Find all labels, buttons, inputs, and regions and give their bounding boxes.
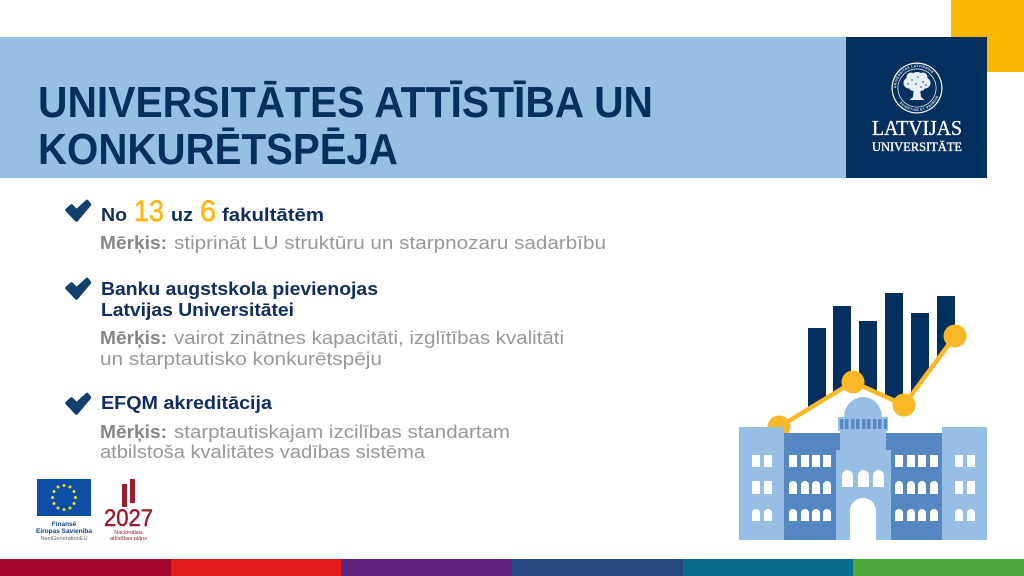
title: UNIVERSITĀTES ATTĪSTĪBA UN [38, 78, 653, 127]
logo wordmark: LATVIJAS [872, 116, 962, 140]
goal text: Mērķis: [100, 421, 167, 442]
goal text: Mērķis: [100, 327, 167, 348]
logo wordmark [872, 116, 962, 154]
heading: merger [101, 278, 378, 320]
logo: Latvijas Universitāte [846, 37, 987, 178]
item 2: Banku augstskola [67, 278, 564, 369]
heading: merger: Latvijas Universitātei [101, 299, 294, 320]
icon: university seal with oak tree: UNIVERSITAS LATVIENSIS [894, 64, 934, 88]
EU caption [36, 521, 92, 542]
logo wordmark: UNIVERSITĀTE [872, 139, 962, 154]
heading: from 13 to 6 faculties: uz [171, 204, 193, 225]
heading: merger: Banku augstskola pievienojas [101, 278, 378, 299]
EU caption: Eiropas Savienība [36, 528, 92, 535]
2027 wordmark: 2027 [104, 505, 153, 532]
yellow corner block [951, 0, 1024, 72]
EU caption: Finansē [52, 521, 77, 528]
heading: from 13 to 6 faculties: No [101, 204, 127, 225]
goal text: atbilstoša kvalitātes vadības sistēma [100, 441, 426, 462]
goal text [100, 421, 510, 462]
goal text [100, 327, 564, 369]
item 1: faculties [67, 195, 606, 253]
goal text: starptautiskajam izcilības standartam [174, 421, 510, 442]
icon: university seal with oak tree: SCIENTIAE ET PATRIAE [900, 96, 938, 111]
title [38, 78, 653, 174]
goal text: stiprināt LU struktūru un starpnozaru sadarbību [174, 232, 606, 253]
EU flag [37, 479, 91, 516]
university building [739, 397, 987, 540]
icon: check mark [67, 280, 90, 298]
item 3: EFQM [67, 392, 510, 462]
logo: National Development Plan 2027 [104, 479, 153, 542]
plan caption [110, 530, 147, 542]
heading: from 13 to 6 faculties [101, 195, 324, 228]
heading: EFQM accreditation: EFQM akreditācija [101, 392, 273, 413]
heading: from 13 to 6 faculties: fakultātēm [222, 204, 324, 225]
bottom colour stripe [0, 559, 1024, 576]
windows [752, 455, 975, 540]
goal text: un starptautisko konkurētspēju [100, 348, 382, 369]
line chart [768, 324, 966, 438]
icon: check mark [67, 394, 90, 413]
illustration: growth chart and university building [739, 293, 1000, 540]
logo: EU funding [36, 479, 92, 542]
goal text: Mērķis: [100, 232, 167, 253]
plan caption: attīstības plāns [110, 536, 147, 542]
bar chart [808, 293, 955, 418]
heading: from 13 to 6 faculties: 13 [134, 195, 164, 228]
heading: from 13 to 6 faculties: 6 [200, 195, 216, 228]
icon: check mark [67, 202, 90, 220]
header panel [0, 37, 846, 178]
plan caption: Nacionālais [114, 530, 143, 536]
title: KONKURĒTSPĒJA [38, 125, 398, 174]
EU caption: NextGenerationEU [40, 536, 88, 542]
icon: university seal with oak tree [892, 62, 942, 114]
goal text: vairot zinātnes kapacitāti, izglītības kvalitāti [174, 327, 564, 348]
logo bars [122, 479, 135, 507]
